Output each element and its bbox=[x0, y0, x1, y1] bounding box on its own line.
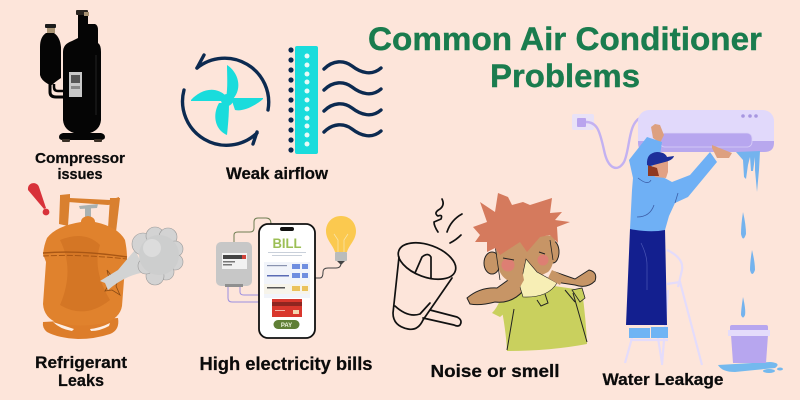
icon: air conditioner unit bbox=[638, 110, 774, 152]
icon: exclamation mark bbox=[28, 183, 49, 215]
icon: wires bbox=[228, 218, 341, 302]
label: refrigerant leaks: Refrigerant bbox=[35, 353, 127, 372]
label: refrigerant leaks: Leaks bbox=[58, 371, 104, 390]
title bbox=[368, 21, 762, 94]
label: noise or smell: Noise or smell bbox=[430, 361, 560, 381]
icon: light bulb bbox=[326, 216, 356, 265]
panel: water leakage bbox=[572, 110, 783, 389]
icon: smartphone bill: BILL bbox=[272, 235, 302, 251]
icon: wall socket and cord bbox=[572, 114, 640, 168]
icon: megaphone bbox=[393, 199, 462, 329]
title: Problems bbox=[490, 58, 640, 94]
label: refrigerant leaks bbox=[35, 353, 127, 390]
panel: refrigerant leaks bbox=[28, 183, 183, 390]
label: compressor issues bbox=[35, 150, 125, 183]
panel: noise or smell bbox=[393, 193, 596, 381]
illustration: child covering nose bbox=[467, 193, 596, 351]
panel: compressor issues bbox=[35, 10, 125, 183]
icon: compressor bbox=[40, 10, 105, 142]
label: high electricity bills: High electricity bills bbox=[200, 354, 372, 374]
label: compressor issues: issues bbox=[58, 166, 102, 183]
icon: gas cloud bbox=[100, 227, 183, 290]
label: compressor issues: Compressor bbox=[35, 150, 125, 167]
label: water leakage: Water Leakage bbox=[602, 371, 724, 389]
icon: smartphone bill bbox=[259, 224, 315, 338]
title: Common Air Conditioner bbox=[368, 21, 762, 57]
icon: stepladder bbox=[625, 250, 702, 365]
icon: air filter grille bbox=[288, 46, 318, 154]
icon: smartphone bill: PAY bbox=[281, 323, 292, 329]
panel: weak airflow bbox=[183, 46, 381, 183]
icon: water drips bbox=[736, 151, 760, 318]
icon: spinning fan bbox=[183, 55, 269, 145]
icon: gas cylinder bbox=[43, 194, 127, 339]
panel: high electricity bills bbox=[200, 216, 372, 374]
icon: air waves bbox=[324, 62, 381, 136]
icon: bucket with puddle bbox=[718, 325, 783, 373]
label: weak airflow: Weak airflow bbox=[226, 164, 329, 183]
illustration: technician bbox=[626, 124, 732, 338]
icon: electricity meter bbox=[216, 242, 252, 287]
